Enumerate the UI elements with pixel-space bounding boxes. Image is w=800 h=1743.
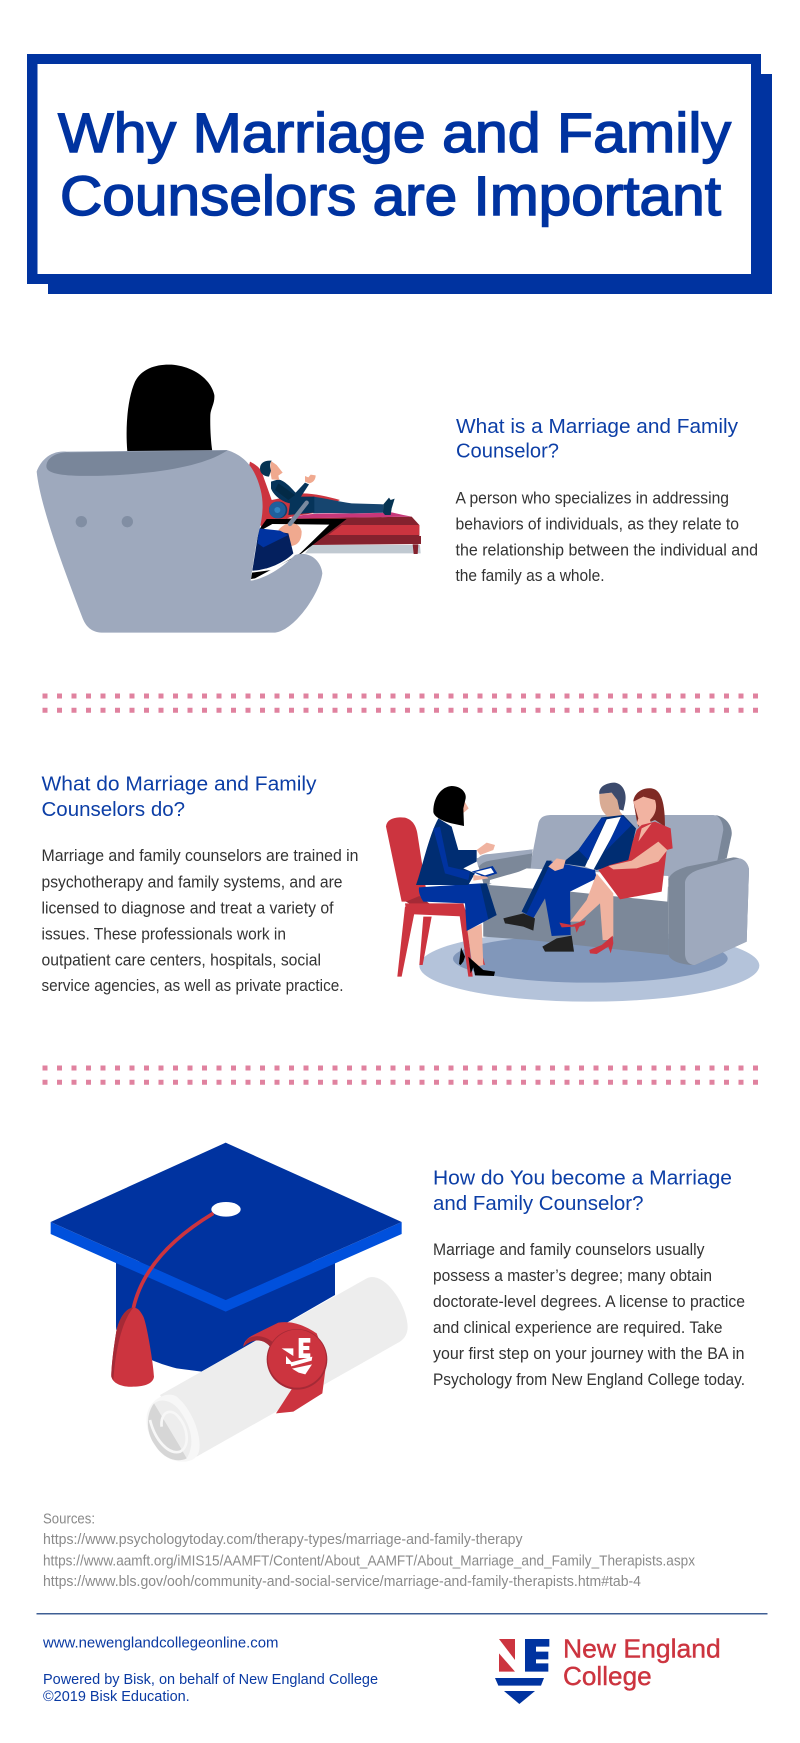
heading: and Family Counselor? [433, 1192, 644, 1215]
heading: Counselor? [456, 440, 559, 462]
sources [43, 1511, 696, 1590]
body text [42, 846, 358, 995]
body text: the relationship between the individual and [456, 540, 758, 560]
logo: New England College [495, 1634, 721, 1704]
footer credits: ©2019 Bisk Education. [43, 1688, 190, 1705]
logo shield [495, 1639, 549, 1704]
title box [27, 54, 772, 294]
body text: possess a master’s degree; many obtain [433, 1266, 712, 1285]
body text: and clinical experience are required. Take [433, 1318, 722, 1337]
body text: Marriage and family counselors are trained in [42, 846, 358, 865]
therapist hair and armchair [37, 365, 322, 633]
logo wordmark: New England [563, 1634, 721, 1664]
icon: seal emblem [282, 1338, 312, 1374]
body text: the family as a whole. [456, 566, 604, 585]
body text: licensed to diagnose and treat a variety of [42, 898, 334, 917]
body text [456, 488, 758, 585]
body text: doctorate-level degrees. A license to practice [433, 1292, 745, 1311]
footer credits: www.newenglandcollegeonline.com [42, 1635, 278, 1652]
title: Why Marriage and Family [58, 101, 731, 164]
body text: your first step on your journey with the BA in [433, 1344, 744, 1363]
footer credits [42, 1635, 378, 1705]
heading: How do You become a Marriage [433, 1166, 732, 1189]
heading: Counselors do? [42, 798, 185, 821]
panel: what counselors do [42, 773, 759, 1002]
panel: how to become a counselor [51, 1143, 745, 1462]
body text: service agencies, as well as private practice. [42, 976, 344, 995]
sources: https://www.aamft.org/iMIS15/AAMFT/Content/About_AAMFT/About_Marriage_and_Family_Therapists.aspx [43, 1553, 696, 1569]
illustration: therapist in armchair with patient on couch [37, 365, 421, 633]
footer credits: Powered by Bisk, on behalf of New England College [43, 1671, 378, 1688]
body text: Marriage and family counselors usually [433, 1240, 705, 1259]
body text: psychotherapy and family systems, and are [42, 872, 342, 891]
heading [42, 773, 317, 821]
body text [433, 1240, 745, 1389]
patient on daybed [245, 461, 421, 579]
body text: behaviors of individuals, as they relate to [456, 514, 739, 534]
title [58, 101, 731, 227]
title: Counselors are Important [60, 164, 721, 227]
panel: what is a counselor [37, 365, 758, 633]
heading: What is a Marriage and Family [456, 415, 739, 438]
illustration: graduation cap and diploma [51, 1143, 408, 1462]
heading [433, 1166, 732, 1215]
body text: outpatient care centers, hospitals, social [42, 950, 321, 969]
illustration: counselor meeting a couple on a sofa [386, 783, 759, 1002]
logo wordmark [563, 1634, 721, 1691]
heading [456, 415, 739, 462]
sources: https://www.psychologytoday.com/therapy-types/marriage-and-family-therapy [43, 1532, 523, 1548]
heading: What do Marriage and Family [42, 773, 317, 796]
sources: https://www.bls.gov/ooh/community-and-social-service/marriage-and-family-therapists.htm#tab-4 [43, 1574, 641, 1590]
body text: A person who specializes in addressing [456, 488, 729, 508]
body text: Psychology from New England College today. [433, 1370, 745, 1389]
body text: issues. These professionals work in [42, 924, 286, 943]
logo wordmark: College [563, 1661, 652, 1691]
sources: Sources: [43, 1511, 95, 1527]
